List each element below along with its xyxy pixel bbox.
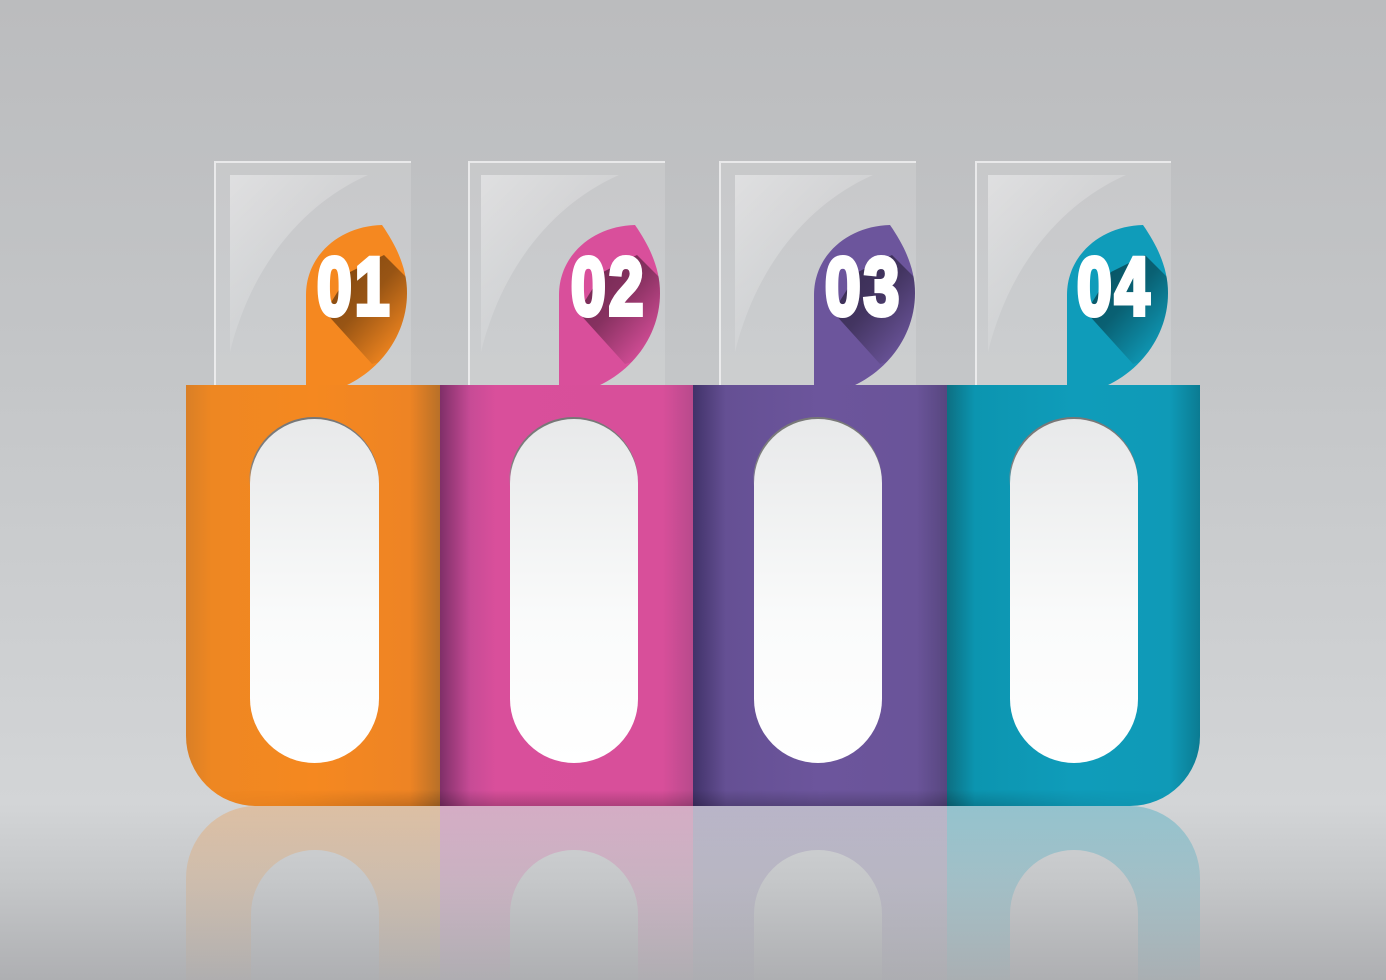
- number 04: 04: [1077, 241, 1152, 333]
- tab 03: [814, 225, 915, 385]
- tab 04: [1067, 225, 1168, 385]
- pink pill cutout: [509, 417, 638, 763]
- panel 4: glass card: [975, 161, 1171, 385]
- orange pill cutout: [249, 417, 379, 763]
- panel: teal band: [947, 385, 1200, 806]
- panel: purple band: [693, 385, 947, 806]
- tab 02: [559, 225, 660, 385]
- number 02: 02: [571, 241, 646, 333]
- panel 2: glass card: [468, 161, 665, 385]
- tab 01: [306, 225, 407, 385]
- reflection of the four bands: [186, 806, 1200, 980]
- number 01: 01: [317, 241, 392, 333]
- panel: pink band: [440, 385, 693, 806]
- panel 3: glass card: [719, 161, 916, 385]
- panel 1: glass card: [214, 161, 411, 385]
- number 03: 03: [825, 240, 902, 332]
- panel: orange band: [186, 385, 440, 806]
- purple pill cutout: [753, 417, 882, 763]
- teal pill cutout: [1009, 417, 1138, 763]
